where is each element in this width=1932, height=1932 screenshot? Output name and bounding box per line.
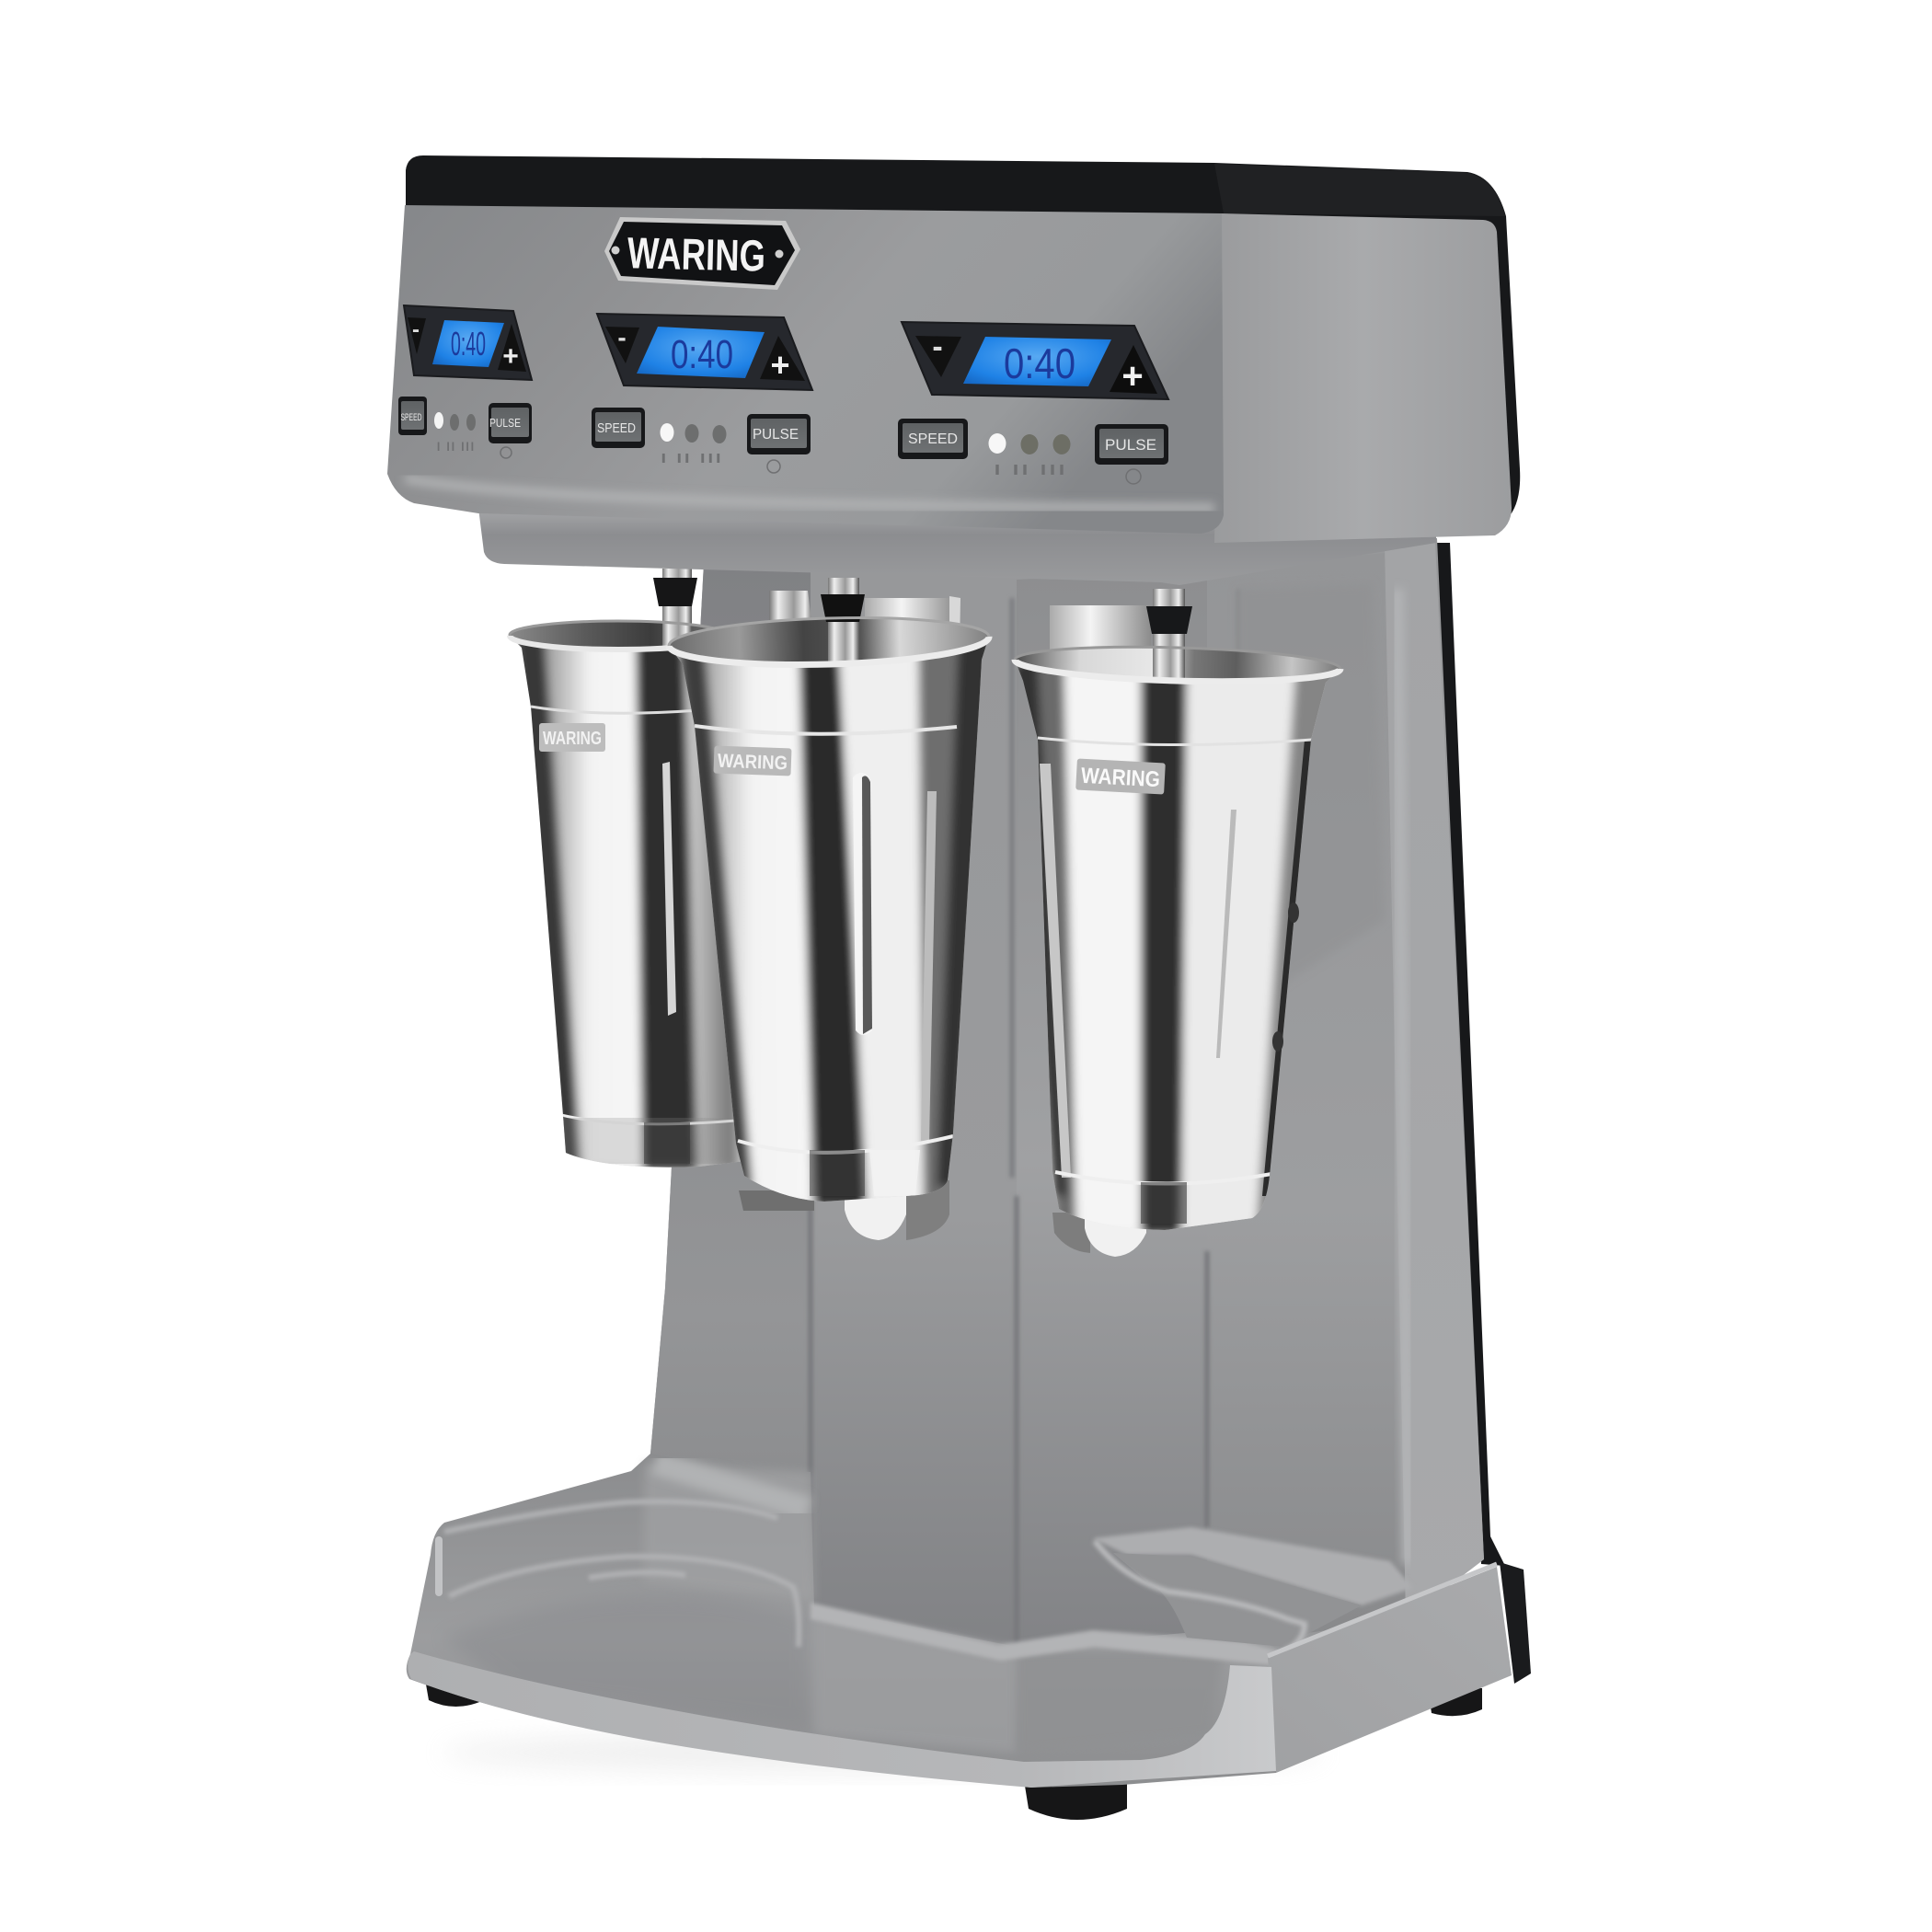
front rim bbox=[408, 1651, 1276, 1788]
speed button bbox=[898, 419, 968, 459]
slope highlight bbox=[655, 1463, 808, 1509]
control panel left: 0:40 bbox=[451, 325, 486, 362]
right well floor bbox=[1113, 1553, 1362, 1647]
display housing bbox=[597, 314, 812, 390]
column seams bbox=[811, 589, 1238, 1647]
base rear black strip bbox=[1500, 1562, 1531, 1684]
body bbox=[1018, 666, 1332, 1230]
control panel left: PULSE bbox=[489, 416, 521, 430]
logo badge: WARING bbox=[627, 229, 766, 282]
control panel right: SPEED bbox=[908, 431, 958, 447]
control panel left: SPEED bbox=[401, 412, 422, 423]
recess top panel bbox=[1237, 583, 1385, 1012]
logo badge bbox=[604, 217, 800, 290]
spindle middle bbox=[821, 578, 865, 666]
spindle left bbox=[653, 569, 697, 670]
lower column ledge bbox=[811, 1603, 1281, 1665]
column section 5 bbox=[1385, 543, 1484, 1619]
speed marks: I II III bbox=[436, 439, 475, 454]
plus key bbox=[1110, 345, 1157, 394]
left wall highlight bbox=[435, 1536, 443, 1596]
tray back shadow bbox=[644, 1463, 814, 1601]
timer mark bbox=[1126, 469, 1141, 484]
control panel left bbox=[398, 305, 532, 458]
ground shadow bbox=[442, 1732, 1325, 1773]
minus key bbox=[915, 336, 961, 377]
rim dents bbox=[1272, 903, 1299, 1052]
base ring bbox=[561, 1115, 736, 1124]
control panel right: + bbox=[1121, 356, 1144, 397]
control panel right: 0:40 bbox=[1004, 339, 1075, 387]
cup logo: WARING bbox=[1080, 764, 1161, 792]
cup logo bbox=[539, 723, 605, 752]
control panel right: PULSE bbox=[1105, 436, 1156, 454]
base right side bbox=[1268, 1567, 1512, 1773]
floor column reflection bbox=[814, 1610, 1017, 1753]
pulse button bbox=[747, 414, 811, 454]
lower highlight bbox=[405, 478, 1214, 508]
cup right bbox=[1007, 643, 1348, 1242]
column section 2 bbox=[811, 570, 1017, 1647]
LCD bbox=[963, 337, 1111, 386]
speed button bbox=[398, 397, 427, 435]
column section 1 bbox=[644, 563, 819, 1638]
bevel highlight bbox=[695, 726, 957, 734]
control panel right bbox=[898, 322, 1168, 484]
drip tip right bbox=[1052, 1213, 1146, 1257]
base ring bbox=[738, 1136, 953, 1153]
LCD bbox=[637, 327, 765, 378]
LEDs bbox=[434, 412, 443, 429]
right well rim bbox=[1093, 1527, 1413, 1605]
speed marks: I II III bbox=[993, 463, 1066, 478]
cup logo: WARING bbox=[543, 729, 602, 749]
tray and silhouette bbox=[407, 1454, 1288, 1788]
control panel left: + bbox=[502, 341, 519, 372]
rim bbox=[1015, 643, 1340, 685]
control panel left: - bbox=[412, 317, 420, 342]
LCD bbox=[432, 320, 504, 367]
control panel middle: SPEED bbox=[597, 420, 636, 436]
pulse button bbox=[1095, 424, 1168, 465]
cup left bbox=[507, 620, 741, 1167]
body bbox=[517, 644, 741, 1167]
base ring bbox=[1055, 1172, 1271, 1184]
column rear black strip bbox=[1432, 543, 1505, 1566]
LEDs bbox=[661, 423, 673, 442]
head front bbox=[387, 205, 1224, 534]
column section 4 bbox=[1207, 552, 1408, 1647]
pulse button bbox=[489, 403, 532, 443]
right well edge bbox=[1095, 1541, 1305, 1651]
LEDs bbox=[988, 433, 1006, 454]
rim bbox=[510, 621, 727, 649]
head black top bbox=[406, 155, 1520, 519]
motor head bbox=[387, 155, 1520, 585]
cup middle interior bbox=[668, 614, 990, 669]
timer mark bbox=[500, 447, 512, 458]
control panel middle: 0:40 bbox=[671, 332, 733, 377]
rubber feet bbox=[425, 1679, 1482, 1820]
cup rest arcs left bbox=[444, 1501, 799, 1647]
rim bbox=[668, 614, 990, 669]
control panel middle: + bbox=[770, 346, 790, 384]
column backing bbox=[650, 538, 1484, 1661]
speed button bbox=[592, 408, 645, 448]
display housing bbox=[404, 305, 532, 380]
head right side bbox=[1214, 213, 1512, 543]
plus key bbox=[498, 324, 526, 372]
control panel right: - bbox=[932, 329, 943, 364]
control panel middle: - bbox=[617, 323, 627, 351]
drip tip and bracket middle bbox=[739, 1180, 949, 1240]
floor darker band bbox=[442, 1595, 810, 1730]
speed marks: I II III bbox=[660, 451, 722, 466]
spindle right bbox=[1146, 589, 1192, 681]
cup middle bbox=[662, 614, 994, 1214]
column bbox=[644, 538, 1484, 1661]
display housing bbox=[902, 322, 1168, 399]
column section 3 bbox=[1017, 570, 1207, 1647]
bevel highlight bbox=[531, 707, 699, 713]
base bbox=[407, 1454, 1512, 1788]
spindle plates behind cups bbox=[769, 591, 1152, 699]
control panel middle bbox=[592, 314, 812, 473]
timer mark bbox=[767, 460, 780, 473]
body bbox=[676, 645, 986, 1202]
column ridge highlight bbox=[1397, 589, 1408, 1564]
bevel highlight bbox=[1038, 738, 1312, 745]
plus key bbox=[760, 336, 805, 381]
under head ledge bbox=[478, 508, 1436, 585]
cup right interior bbox=[1015, 643, 1340, 685]
control panel middle: PULSE bbox=[753, 427, 799, 443]
minus key bbox=[605, 327, 639, 363]
cup left interior bbox=[510, 621, 727, 649]
cup logo: WARING bbox=[718, 751, 788, 774]
mixer bbox=[387, 155, 1531, 1820]
head top sheen bbox=[1214, 164, 1505, 216]
minus key bbox=[408, 317, 426, 354]
